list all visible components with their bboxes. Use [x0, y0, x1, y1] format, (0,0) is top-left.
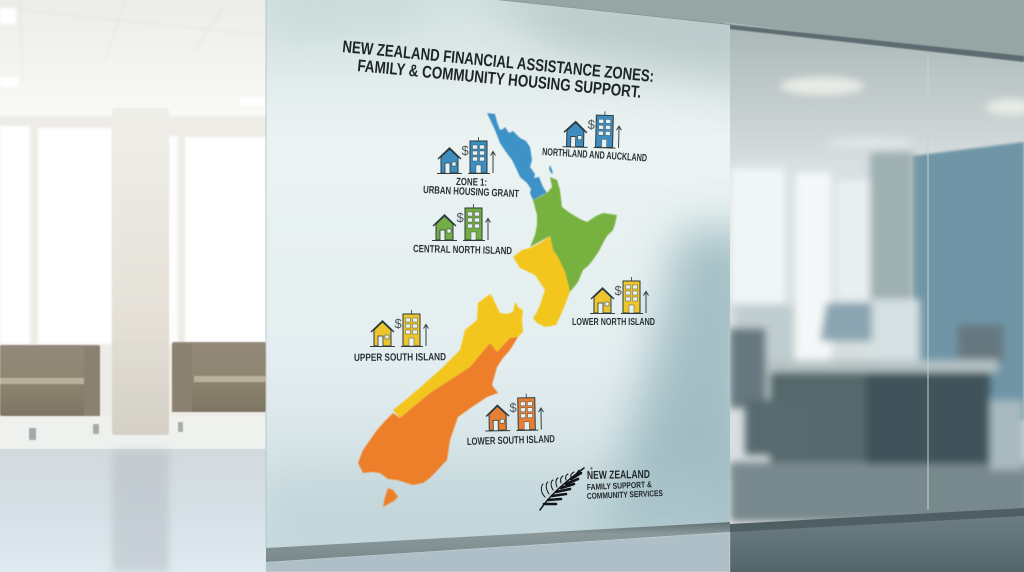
zone: Central North Island: [413, 204, 512, 257]
region: Northland and Auckland: [487, 113, 547, 200]
icon: house, dollar and tower green: $: [456, 210, 464, 225]
icon: house, dollar and tower blue: $: [462, 143, 470, 158]
zone: Upper South Island: UPPER SOUTH ISLAND: [354, 351, 446, 364]
zone: Central North Island: CENTRAL NORTH ISLAND: [413, 243, 512, 257]
zone: Northland and Auckland: NORTHLAND AND AUCKLAND: [542, 146, 648, 164]
island: Stewart: [383, 488, 398, 507]
zone 1: Urban Housing Grant: URBAN HOUSING GRANT: [423, 184, 520, 200]
icon: house, dollar and tower yellow south: $: [394, 316, 402, 331]
wall panel: [266, 0, 760, 562]
icon: house, dollar and tower orange: $: [509, 400, 518, 415]
region: Upper South Island: [393, 294, 523, 418]
icon: silver fern: [540, 468, 584, 510]
zone: Lower South Island: LOWER SOUTH ISLAND: [467, 433, 555, 448]
logo: fern and organisation name: [540, 466, 663, 510]
zone: Northland and Auckland: [542, 110, 648, 164]
logo: fern and organisation name: COMMUNITY SERVICES: [587, 488, 663, 501]
zone: Lower North Island: LOWER NORTH ISLAND: [572, 316, 655, 328]
map of New Zealand: [358, 113, 617, 507]
region: Lower South Island: [358, 337, 518, 485]
logo: fern and organisation name: FAMILY SUPPORT &: [587, 479, 652, 492]
title: FAMILY & COMMUNITY HOUSING SUPPORT.: [357, 56, 642, 102]
zone: Lower South Island: [467, 393, 555, 448]
region: Central North Island: [530, 177, 617, 292]
zone 1: Urban Housing Grant: [423, 137, 520, 200]
floor below panel: [266, 532, 730, 572]
zone: Upper South Island: [354, 310, 446, 364]
zone: Lower North Island: [572, 277, 655, 328]
icon: house, dollar and tower yellow: $: [614, 283, 622, 298]
island: Great Barrier: [549, 165, 553, 174]
office background: left room: [0, 0, 270, 572]
logo: fern and organisation name: NEW ZEALAND: [587, 469, 650, 482]
icon: house, dollar and tower: $: [587, 117, 596, 132]
region: Lower North Island: [513, 236, 570, 327]
zone 1: Urban Housing Grant: ZONE 1:: [456, 176, 487, 189]
logo: fern and organisation name: ®: [590, 466, 593, 471]
title: NEW ZEALAND FINANCIAL ASSISTANCE ZONES:: [342, 37, 655, 86]
office background: right glass room: [490, 0, 1024, 572]
